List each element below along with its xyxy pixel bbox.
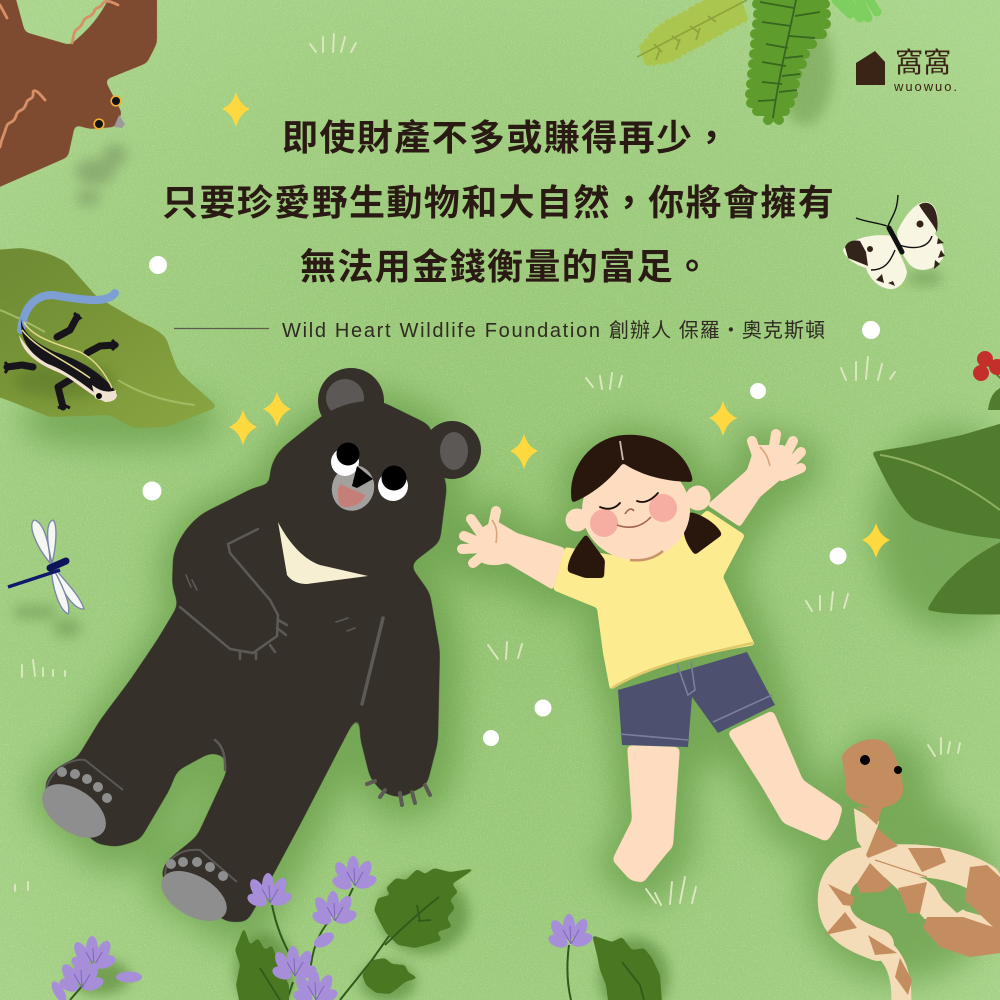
stems xyxy=(70,878,571,1000)
icon: lizard xyxy=(5,293,117,408)
girl xyxy=(462,434,843,883)
icon: dragonfly xyxy=(8,520,84,614)
bear fur lines xyxy=(180,529,430,805)
flower: red xyxy=(973,351,1000,410)
bear body xyxy=(45,401,447,922)
bear ears xyxy=(318,368,481,479)
snake head xyxy=(842,739,903,808)
leaf: left xyxy=(0,248,218,428)
flowers and leaves: bottom xyxy=(49,856,669,1000)
white dots xyxy=(142,256,880,746)
dragonfly shadow xyxy=(15,605,81,638)
title quote: 即使財產不多或賺得再少， xyxy=(282,117,731,158)
ground shadows xyxy=(40,407,1000,965)
logo: wuowuo. xyxy=(893,79,957,94)
leaf: right large xyxy=(872,415,1000,615)
bear xyxy=(32,368,481,931)
snake xyxy=(825,739,1000,1000)
girl arms and hands xyxy=(462,434,801,590)
fern: light green xyxy=(836,0,877,18)
bear foot left xyxy=(32,760,123,849)
girl pigtails xyxy=(568,512,722,578)
leaf: small serrated xyxy=(362,958,418,994)
girl shirt xyxy=(553,510,755,690)
attribution xyxy=(174,319,825,342)
girl shorts xyxy=(618,652,775,747)
attribution: Wild Heart Wildlife Foundation xyxy=(282,320,600,342)
title quote: 只要珍愛野生動物和大自然，你將會擁有 xyxy=(162,182,835,223)
girl legs xyxy=(612,710,843,883)
icon: bird of prey xyxy=(0,0,157,200)
leaf shadows xyxy=(70,874,669,1000)
leaf: bottom right xyxy=(592,935,664,1000)
title quote xyxy=(162,117,835,287)
fern: green xyxy=(750,0,833,125)
bear foot right xyxy=(153,850,237,931)
icon: butterfly xyxy=(843,195,945,289)
snake body xyxy=(834,810,993,1000)
purple flowers xyxy=(246,873,293,909)
logo xyxy=(856,47,957,94)
snake markings xyxy=(825,807,1000,995)
sparkles xyxy=(222,92,890,558)
title quote: 無法用金錢衡量的富足。 xyxy=(300,246,711,287)
girl head xyxy=(566,435,710,560)
bear chest crescent xyxy=(278,522,368,584)
snake gap xyxy=(932,882,967,913)
attribution: 創辦人 保羅・奧克斯頓 xyxy=(609,319,825,342)
fern: olive xyxy=(637,0,747,62)
leaf: bottom left xyxy=(235,927,289,1000)
leaf: large serrated xyxy=(374,868,476,948)
logo: 窩窩 xyxy=(895,47,951,78)
bird shadow xyxy=(75,144,127,206)
bear face xyxy=(325,442,408,517)
